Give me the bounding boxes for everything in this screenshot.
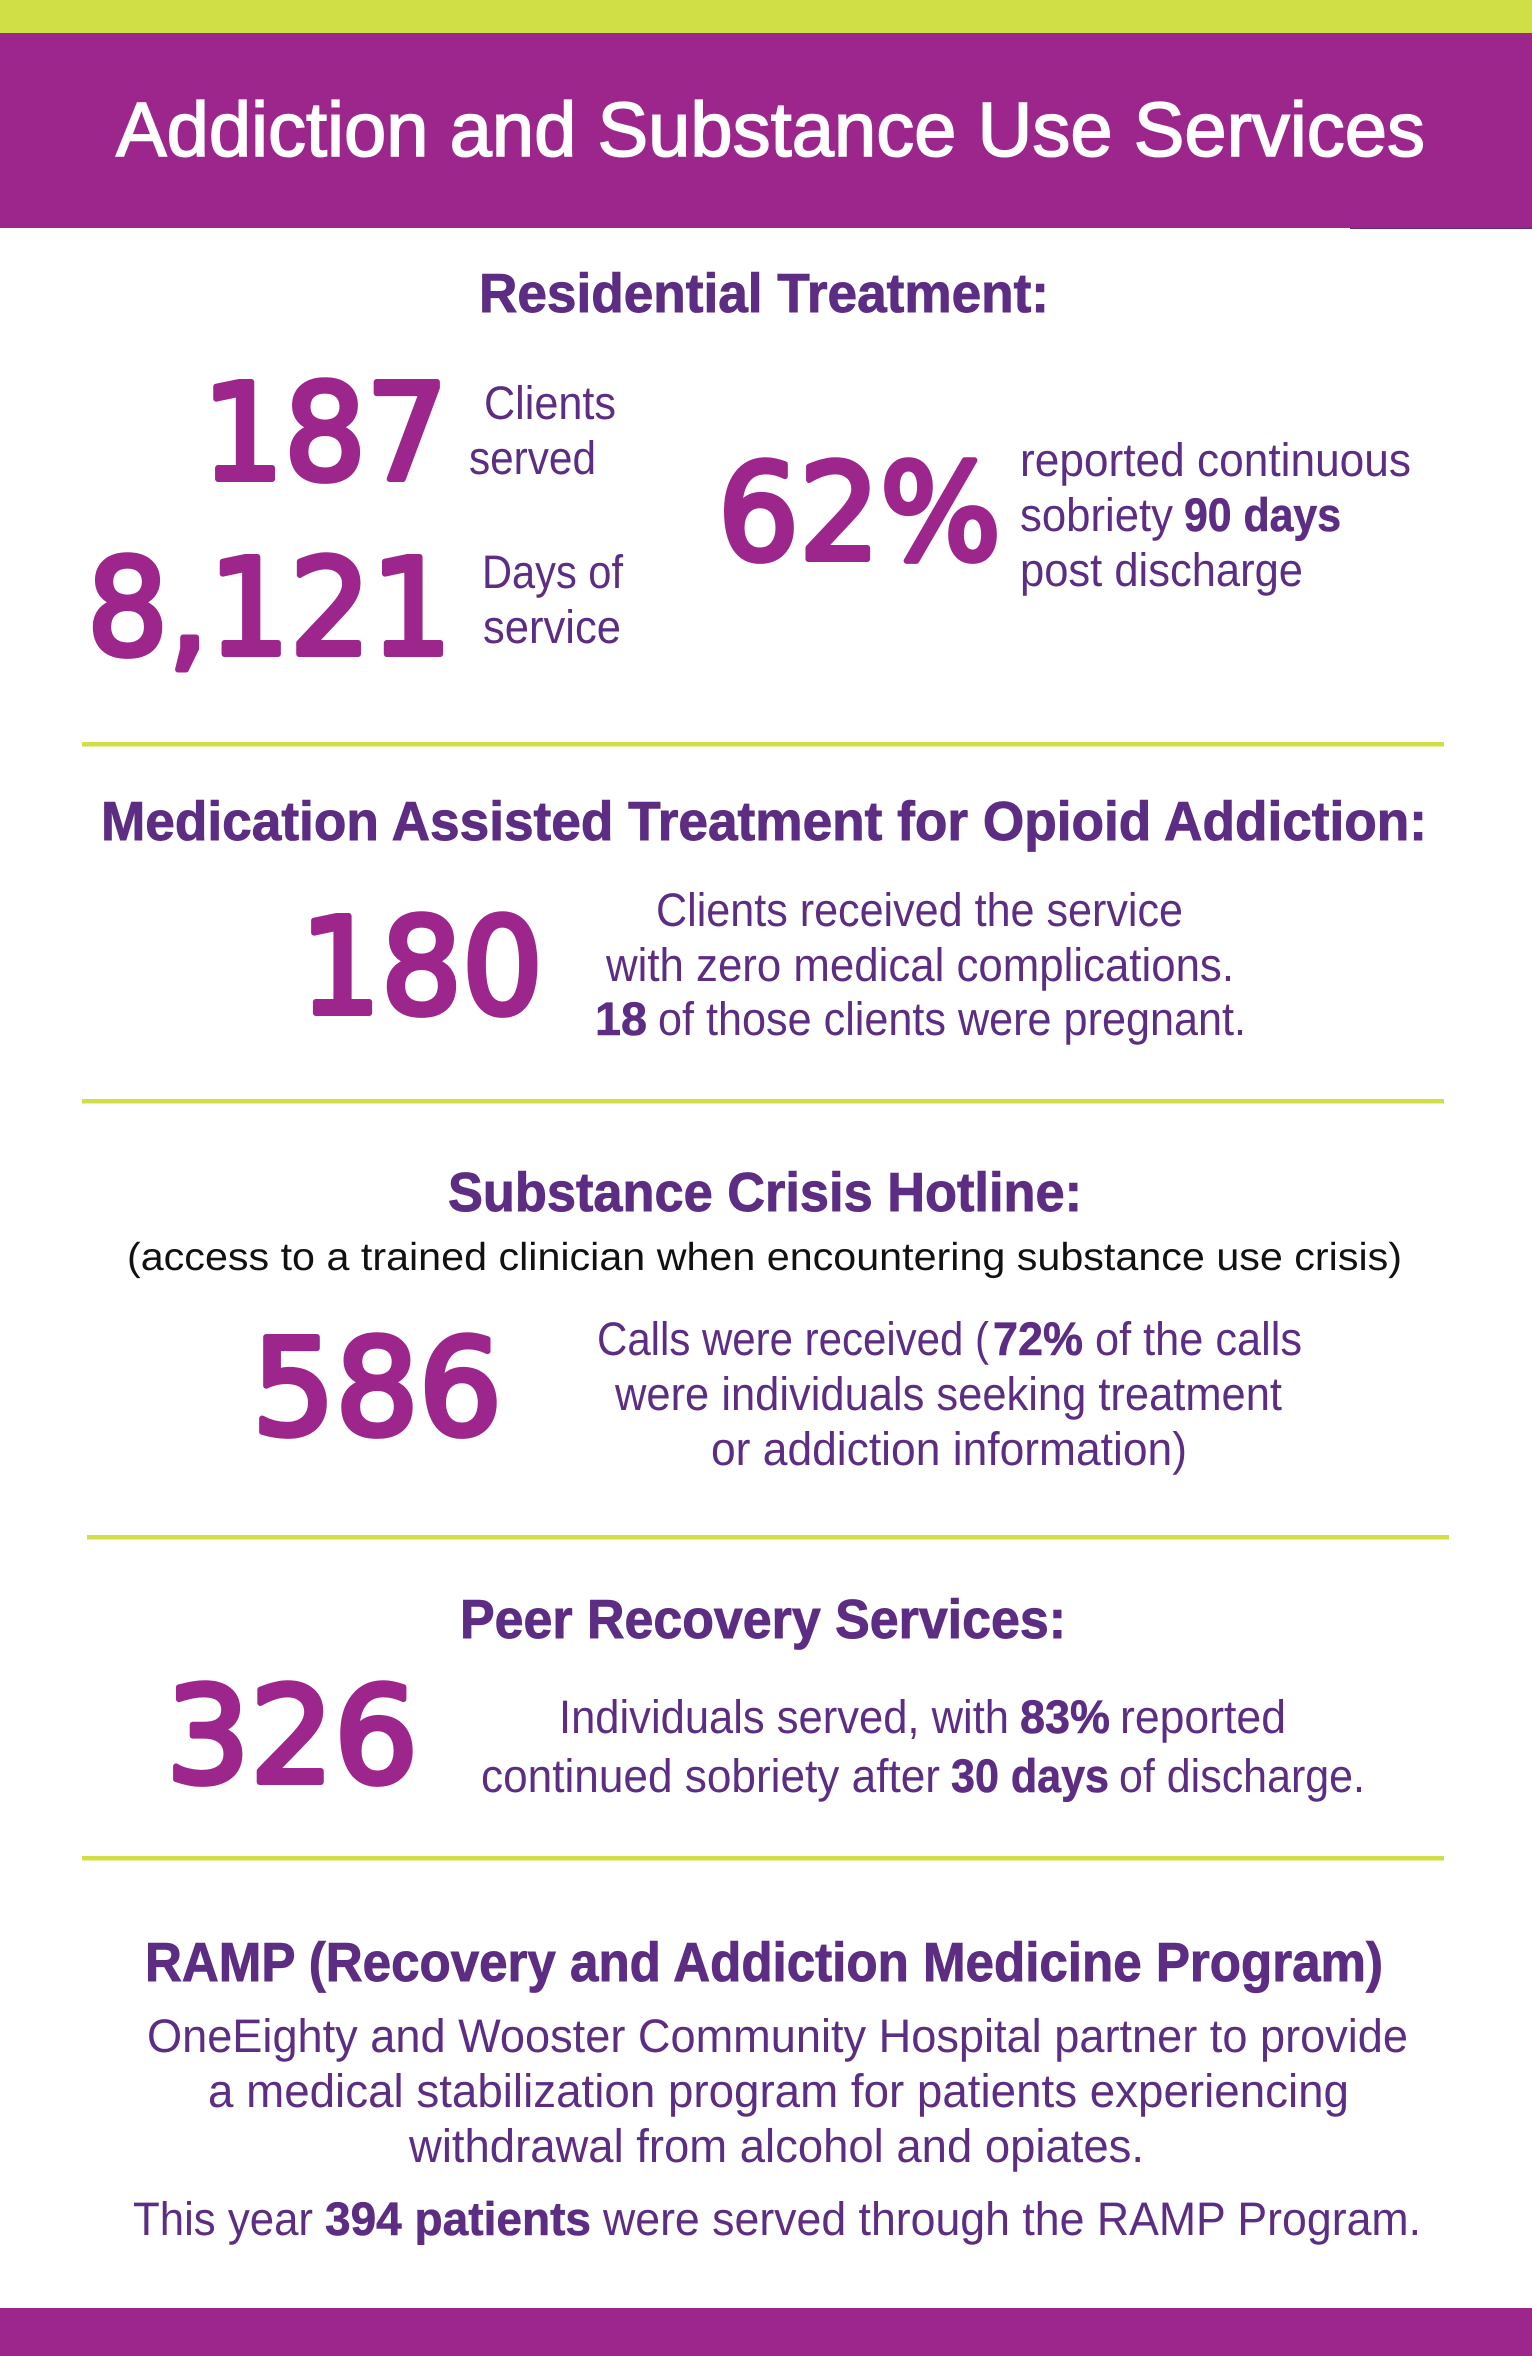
subheading: hotline note: (access to a trained clinician when encountering substance use crisis) <box>127 1236 1402 1279</box>
text: 326 description <box>481 1690 1365 1802</box>
title banner <box>0 33 1532 229</box>
stat: 8,121 days of service: 8,121 <box>87 532 452 686</box>
heading: medication assisted treatment: Medication Assisted Treatment for Opioid Addiction: <box>101 790 1427 852</box>
top lime band <box>0 0 1532 33</box>
title: Addiction and Substance Use Services <box>116 87 1425 173</box>
text: 326 description: of discharge. <box>1119 1749 1365 1802</box>
stat: 8,121 days of service: Days of <box>482 545 624 598</box>
text: RAMP description: OneEighty and Wooster Community Hospital partner to provide <box>147 2009 1408 2062</box>
text: 180 description <box>595 883 1246 1045</box>
stat: 326: 326 <box>166 1660 418 1814</box>
stat: 586: 586 <box>252 1312 502 1466</box>
text: 586 description: 72% <box>993 1312 1083 1365</box>
panel: RAMP <box>133 1931 1421 2245</box>
text: 326 description: 83% <box>1020 1690 1110 1743</box>
bottom band <box>0 2308 1532 2356</box>
text: 586 description: or addiction information) <box>711 1422 1187 1475</box>
stat: 62% sobriety: 62% <box>718 437 1001 591</box>
text: RAMP description: a medical stabilization program for patients experiencing <box>208 2064 1349 2117</box>
text: 180 description: 18 <box>595 992 647 1045</box>
heading: residential treatment: Residential Treatment: <box>479 262 1049 324</box>
panel: peer recovery services <box>166 1588 1365 1814</box>
text: RAMP patients served: were served through the RAMP Program. <box>602 2192 1421 2245</box>
text: 326 description: 30 days <box>951 1749 1109 1802</box>
stat: 187 clients served: Clients <box>484 376 616 429</box>
stat: 62% sobriety: reported continuous <box>1020 433 1411 486</box>
stat: 62% sobriety: post discharge <box>1020 543 1303 596</box>
text: 326 description: continued sobriety after <box>481 1749 940 1802</box>
text: 180 description: with zero medical complications. <box>605 938 1234 991</box>
heading: RAMP: RAMP (Recovery and Addiction Medicine Program) <box>145 1931 1383 1993</box>
panel: medication assisted treatment <box>101 790 1427 1045</box>
text: 586 description: of the calls <box>1095 1312 1302 1365</box>
stat: 187 clients served: served <box>469 431 596 484</box>
text: RAMP patients served: This year <box>133 2192 313 2245</box>
panel: substance crisis hotline <box>127 1161 1402 1475</box>
text: 180 description: Clients received the service <box>656 883 1183 936</box>
text: RAMP description <box>147 2009 1408 2172</box>
text: 586 description: Calls were received ( <box>597 1312 989 1365</box>
stat: 62% sobriety: 90 days <box>1184 488 1341 541</box>
stat: 62% sobriety: sobriety <box>1020 488 1173 541</box>
stat: 8,121 days of service: service <box>483 600 621 653</box>
text: 180 description: of those clients were pregnant. <box>658 992 1246 1045</box>
text: RAMP patients served <box>133 2192 1421 2245</box>
text: RAMP patients served: 394 patients <box>325 2192 591 2245</box>
text: 586 description <box>597 1312 1302 1475</box>
heading: peer recovery services: Peer Recovery Services: <box>460 1588 1066 1650</box>
panel: residential treatment <box>87 262 1411 686</box>
stat: 62% sobriety <box>718 433 1411 596</box>
text: 326 description: reported <box>1120 1690 1286 1743</box>
text: 586 description: were individuals seeking treatment <box>614 1367 1282 1420</box>
heading: substance crisis hotline: Substance Crisis Hotline: <box>448 1161 1082 1223</box>
text: 326 description: Individuals served, with <box>559 1690 1009 1743</box>
text: RAMP description: withdrawal from alcohol and opiates. <box>408 2119 1144 2172</box>
stat: 180: 180 <box>300 891 543 1045</box>
stat: 187 clients served: 187 <box>202 357 448 511</box>
stat: 187 clients served <box>202 357 616 511</box>
